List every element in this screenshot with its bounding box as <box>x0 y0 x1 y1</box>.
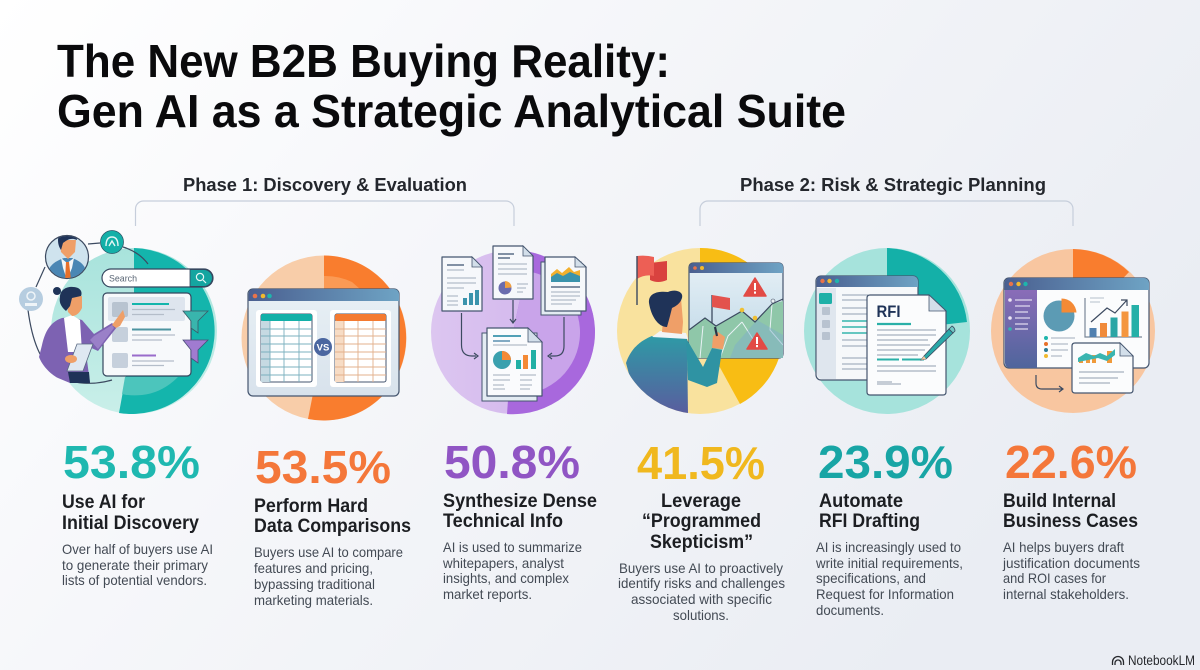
description: specifications, and <box>816 571 926 586</box>
description <box>442 540 582 602</box>
description: justification documents <box>1002 556 1140 571</box>
heading: programmed skepticism: “Programmed <box>642 511 761 532</box>
description: whitepapers, analyst <box>442 556 564 571</box>
heading: RFI drafting: Automate <box>819 491 903 512</box>
description: AI is used to summarize <box>443 540 582 555</box>
description: AI is increasingly used to <box>816 540 961 555</box>
orbit line <box>28 243 148 383</box>
description <box>618 561 785 623</box>
description <box>815 540 963 618</box>
heading: synthesize: Technical Info <box>443 511 563 532</box>
flag on map <box>712 295 730 323</box>
description: Over half of buyers use AI <box>62 542 213 557</box>
phase 2 header and bracket <box>700 175 1073 226</box>
description <box>62 542 213 588</box>
description: marketing materials. <box>254 593 373 608</box>
red flags on pole <box>637 256 667 305</box>
source document left <box>442 257 482 311</box>
heading: business cases: Build Internal <box>1003 491 1116 512</box>
heading: business cases: Business Cases <box>1003 511 1138 532</box>
heading: initial discovery <box>62 492 199 534</box>
RFI document: RFI <box>876 302 900 321</box>
icon: teal network badge <box>100 230 124 254</box>
phase 1 header and bracket <box>136 175 514 226</box>
legend dots <box>1044 336 1075 358</box>
summary document <box>482 328 542 401</box>
stat column 4 <box>618 437 785 623</box>
title: Gen AI as a Strategic Analytical Suite <box>57 85 846 137</box>
description: features and pricing, <box>254 561 373 576</box>
heading: programmed skepticism: Skepticism” <box>650 532 753 553</box>
stat: 50.8%: 50.8% <box>444 436 580 488</box>
heading: initial discovery: Initial Discovery <box>62 513 199 534</box>
risk dashboard window <box>689 263 783 358</box>
RFI document <box>867 295 946 395</box>
description: to generate their primary <box>62 558 208 573</box>
panel: programmed skepticism illustration <box>617 248 784 415</box>
warning triangle top <box>744 278 766 296</box>
small report document <box>1072 343 1133 393</box>
description: and ROI cases for <box>1003 571 1106 586</box>
stat: 53.5%: 53.5% <box>255 441 391 493</box>
pie chart <box>1044 298 1076 332</box>
phase 1 header and bracket: Phase 1: Discovery & Evaluation <box>183 175 467 195</box>
description: solutions. <box>673 608 729 623</box>
left comparison table <box>261 314 312 382</box>
description: Buyers use AI to proactively <box>619 561 783 576</box>
icon: grey gear badge <box>19 287 43 311</box>
heading: synthesize: Synthesize Dense <box>443 491 597 512</box>
arrow to report <box>1036 375 1063 392</box>
description: insights, and complex <box>443 571 569 586</box>
background app window <box>816 276 918 380</box>
search bar <box>102 269 213 287</box>
panel: document synthesis illustration <box>431 246 595 414</box>
title <box>57 35 846 137</box>
versus badge <box>314 338 332 356</box>
panel: RFI drafting illustration <box>804 248 970 414</box>
stat: 23.9%: 23.9% <box>818 436 953 488</box>
right comparison table <box>335 314 386 382</box>
stat column 1 <box>62 436 213 588</box>
description: associated with specific <box>631 592 772 607</box>
description: Buyers use AI to compare <box>254 545 403 560</box>
heading: programmed skepticism <box>642 491 761 553</box>
stat: 22.6%: 22.6% <box>1005 436 1137 488</box>
stat column 5 <box>815 436 963 618</box>
heading: hard data comparisons <box>254 496 411 537</box>
stat: 41.5%: 41.5% <box>637 437 765 489</box>
panel: data comparison illustration <box>242 256 406 420</box>
stat column 6 <box>1002 436 1140 602</box>
warning triangle bottom <box>747 333 767 349</box>
arrows into summary document <box>462 300 564 359</box>
description <box>1002 540 1140 602</box>
heading: synthesize <box>443 491 597 532</box>
stat: 53.8%: 53.8% <box>63 436 200 488</box>
panel: business case illustration <box>991 249 1155 413</box>
icon: man avatar <box>46 232 88 280</box>
heading: programmed skepticism: Leverage <box>661 491 741 512</box>
description: market reports. <box>443 587 532 602</box>
description: bypassing traditional <box>254 577 375 592</box>
description: documents. <box>816 603 884 618</box>
icon: teal funnel <box>183 311 208 333</box>
heading: business cases <box>1003 491 1138 532</box>
search bar: Search <box>109 274 137 284</box>
phase 2 header and bracket: Phase 2: Risk & Strategic Planning <box>740 175 1046 195</box>
analyst hand and pen <box>712 327 725 349</box>
description: identify risks and challenges <box>618 576 785 591</box>
heading: hard data comparisons: Data Comparisons <box>254 516 411 537</box>
heading: initial discovery: Use AI for <box>62 492 146 513</box>
description: Request for Information <box>816 587 954 602</box>
source document right <box>541 257 586 315</box>
heading: RFI drafting <box>819 491 920 532</box>
description: AI helps buyers draft <box>1003 540 1124 555</box>
heading: hard data comparisons: Perform Hard <box>254 496 368 517</box>
source document middle <box>493 246 533 299</box>
browser window <box>248 289 399 396</box>
dashboard window <box>1004 278 1149 368</box>
versus badge: VS <box>317 342 329 354</box>
analyst head <box>649 291 683 334</box>
description: write initial requirements, <box>815 556 963 571</box>
woman figure <box>39 287 125 383</box>
heading: RFI drafting: RFI Drafting <box>819 511 920 532</box>
results card <box>103 293 191 376</box>
bar chart <box>1085 298 1142 337</box>
description: internal stakeholders. <box>1003 587 1129 602</box>
analyst figure <box>626 331 722 415</box>
description <box>254 545 403 608</box>
panel: initial discovery illustration <box>19 230 217 414</box>
stat column 2 <box>254 441 411 608</box>
icon: pencil <box>921 326 955 360</box>
description: lists of potential vendors. <box>62 573 207 588</box>
title: The New B2B Buying Reality: <box>57 35 670 87</box>
stat column 3 <box>442 436 597 602</box>
icon: purple funnel <box>183 340 208 363</box>
